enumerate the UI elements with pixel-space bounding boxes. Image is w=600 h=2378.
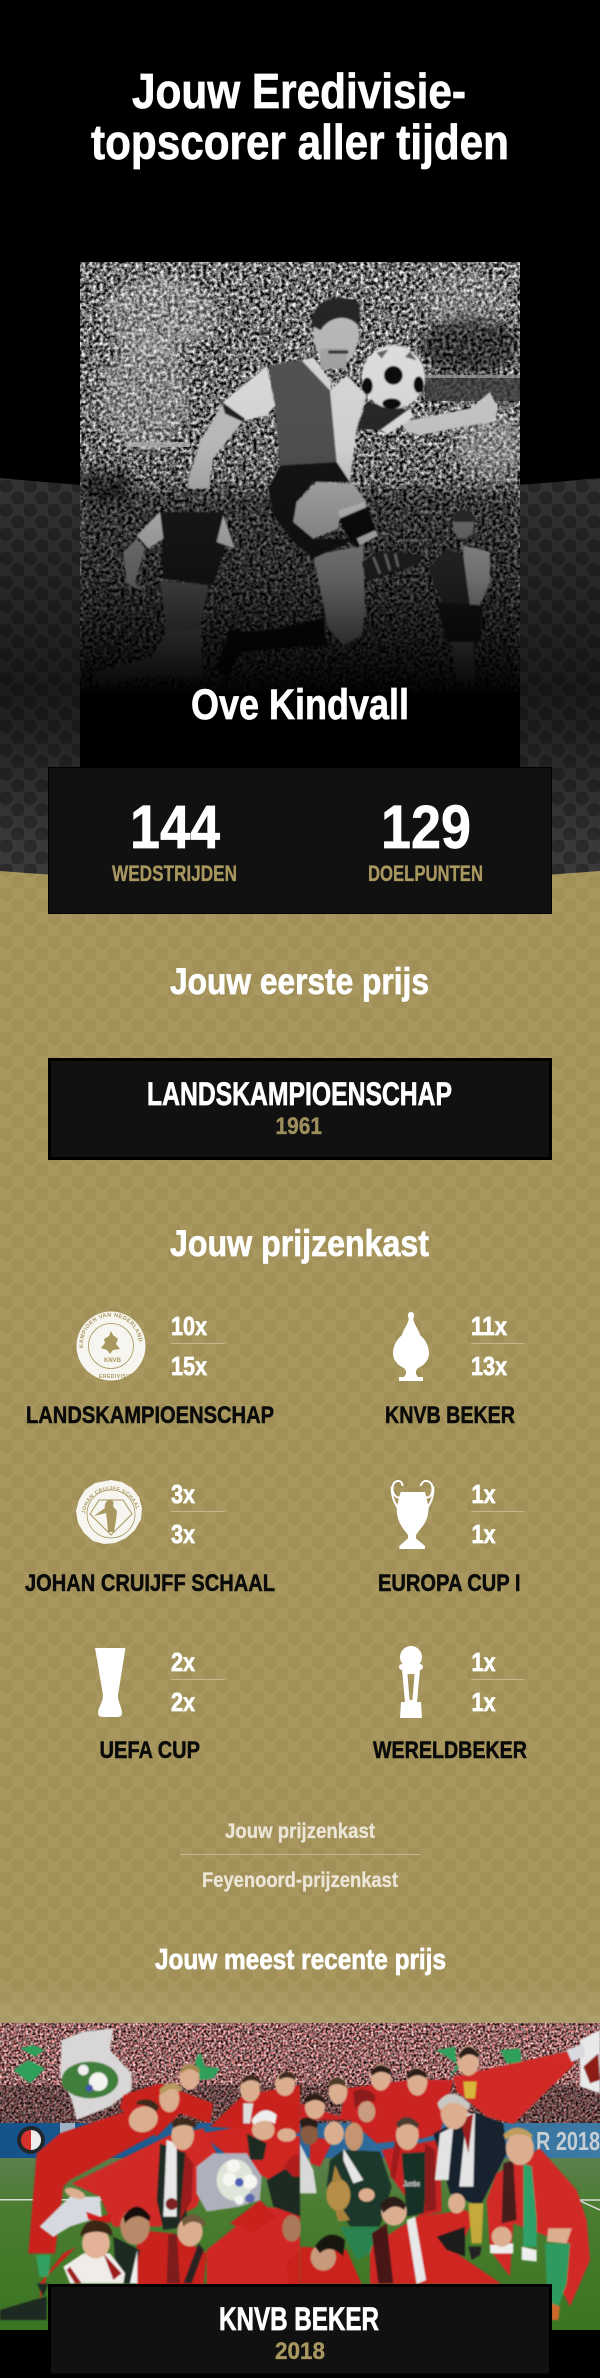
heading: first prize: Jouw eerste prijs (170, 961, 429, 1002)
yellow jersey (463, 2082, 477, 2098)
faces (63, 2063, 301, 2246)
dark gaps between players (0, 2133, 300, 2320)
gold trophy (326, 2165, 350, 2222)
trophy item: Europa Cup I: 1x (472, 1479, 496, 1509)
green jerseys (327, 2150, 428, 2260)
trophy item: Johan Cruijff Schaal (25, 1479, 275, 1597)
icon: KNVB cup (393, 1312, 429, 1381)
photo: team right half (300, 2030, 600, 2320)
icon: Johan Cruijff Schaal badge: JOHAN CRUIJFF SCHAAL (82, 1486, 140, 1514)
player name: Ove Kindvall (191, 681, 409, 729)
green jerseys: Jumbo (403, 2179, 420, 2189)
legend: your cabinet vs Feyenoord cabinet: Feyenoord-prijzenkast (202, 1869, 398, 1892)
trophy item: landskampioenschap: 15x (171, 1351, 207, 1381)
trophy item: Wereldbeker: WERELDBEKER (373, 1737, 527, 1764)
player photo: Ove Kindvall (80, 262, 525, 772)
background: black top (0, 0, 600, 520)
bouquet centre (197, 2153, 262, 2212)
hair (300, 2047, 533, 2257)
trophy item: KNVB beker (385, 1311, 525, 1429)
team photo (0, 2023, 600, 2330)
trophy item: Wereldbeker: 1x (472, 1647, 496, 1677)
green sock (545, 2243, 570, 2307)
photo: crowd (0, 2023, 600, 2125)
panel: most recent prize (50, 2286, 550, 2375)
photo: crowd light and dark patches (80, 270, 525, 710)
trophy item: landskampioenschap: LANDSKAMPIOENSCHAP (26, 1402, 274, 1429)
figure: right teammate (428, 511, 490, 682)
heading: trophy cabinet: Jouw prijzenkast (170, 1223, 429, 1264)
right side crowd figures and scarf (580, 2030, 600, 2093)
trophy item: UEFA Cup: UEFA CUP (100, 1737, 200, 1764)
red robes (300, 2052, 590, 2307)
panel: most recent prize: KNVB BEKER (219, 2301, 379, 2337)
green sock (36, 2255, 51, 2277)
title (91, 65, 509, 170)
photo: pitch (0, 2157, 600, 2330)
stat: matches: WEDSTRIJDEN (112, 861, 237, 886)
panel: first prize (50, 1060, 550, 1158)
background: gold patterned section (0, 871, 600, 2030)
green flags (13, 2045, 45, 2083)
trophy item: Johan Cruijff Schaal: 3x (171, 1519, 195, 1549)
stat: goals: 129 (381, 793, 471, 861)
stat: matches: 144 (130, 793, 220, 861)
icon: Johan Cruijff Schaal badge (76, 1480, 142, 1544)
panel: first prize: 1961 (276, 1113, 322, 1140)
red robes (28, 2083, 300, 2300)
trophy item: KNVB beker: 11x (471, 1311, 507, 1341)
stat: goals (368, 793, 483, 886)
trophy item: Europa Cup I: EUROPA CUP I (378, 1570, 520, 1597)
figure: main player (188, 298, 498, 679)
icon: KNVB Eredivisie badge (76, 1312, 146, 1380)
trophy item: Europa Cup I: 1x (472, 1519, 496, 1549)
panel: first prize: LANDSKAMPIOENSCHAP (147, 1076, 452, 1112)
trophy item: KNVB beker: KNVB BEKER (385, 1402, 515, 1429)
stat: matches (112, 793, 237, 886)
navy suit (433, 2113, 507, 2207)
hair (123, 2064, 296, 2227)
title: topscorer aller tijden (91, 116, 509, 170)
icon: KNVB Eredivisie badge: EREDIVISIE (99, 1374, 132, 1380)
heading: most recent prize: Jouw meest recente prijs (155, 1944, 446, 1976)
panel: career stats (48, 768, 552, 914)
black footer (0, 2330, 600, 2378)
beanie (252, 2110, 277, 2125)
scarves (130, 2103, 253, 2283)
trophy item: Wereldbeker (373, 1646, 527, 1764)
icon: UEFA cup (95, 1648, 126, 1717)
trophy item: landskampioenschap: 10x (171, 1311, 207, 1341)
icon: KNVB Eredivisie badge: KAMPIOEN VAN NEDERLAND (79, 1312, 142, 1348)
photo: team left half (0, 2028, 301, 2320)
photo: advertising boards (0, 2123, 600, 2158)
green flags (436, 2047, 460, 2077)
figure: left teammate (93, 512, 235, 685)
icon: world cup (399, 1646, 423, 1718)
trophy item: Johan Cruijff Schaal: 3x (171, 1479, 195, 1509)
trophy item: UEFA Cup: 2x (171, 1687, 195, 1717)
child and flowers (40, 2197, 125, 2283)
photo: figures (93, 298, 498, 685)
scarves (300, 2113, 537, 2284)
trophy item: Johan Cruijff Schaal: JOHAN CRUIJFF SCHAAL (25, 1570, 275, 1597)
trophy item: KNVB beker: 13x (471, 1351, 507, 1381)
legend: your cabinet vs Feyenoord cabinet (180, 1820, 420, 1892)
flower bouquet top (60, 2028, 132, 2120)
trophy item: UEFA Cup: 2x (171, 1647, 195, 1677)
legend: your cabinet vs Feyenoord cabinet: Jouw prijzenkast (225, 1820, 375, 1843)
background: dark patterned band (0, 478, 600, 900)
trophy item: UEFA Cup (95, 1647, 225, 1764)
photo: stadium rail (125, 375, 520, 447)
panel: most recent prize: 2018 (275, 2338, 325, 2365)
title: Jouw Eredivisie- (132, 65, 466, 119)
trophy item: Wereldbeker: 1x (472, 1687, 496, 1717)
stat: goals: DOELPUNTEN (368, 861, 483, 886)
icon: European cup (392, 1481, 433, 1549)
trophy item: landskampioenschap (26, 1311, 274, 1429)
faces (301, 2046, 534, 2271)
icon: KNVB Eredivisie badge: KNVB (104, 1358, 122, 1364)
trophy item: Europa Cup I (378, 1479, 525, 1597)
figure: football (362, 345, 425, 409)
